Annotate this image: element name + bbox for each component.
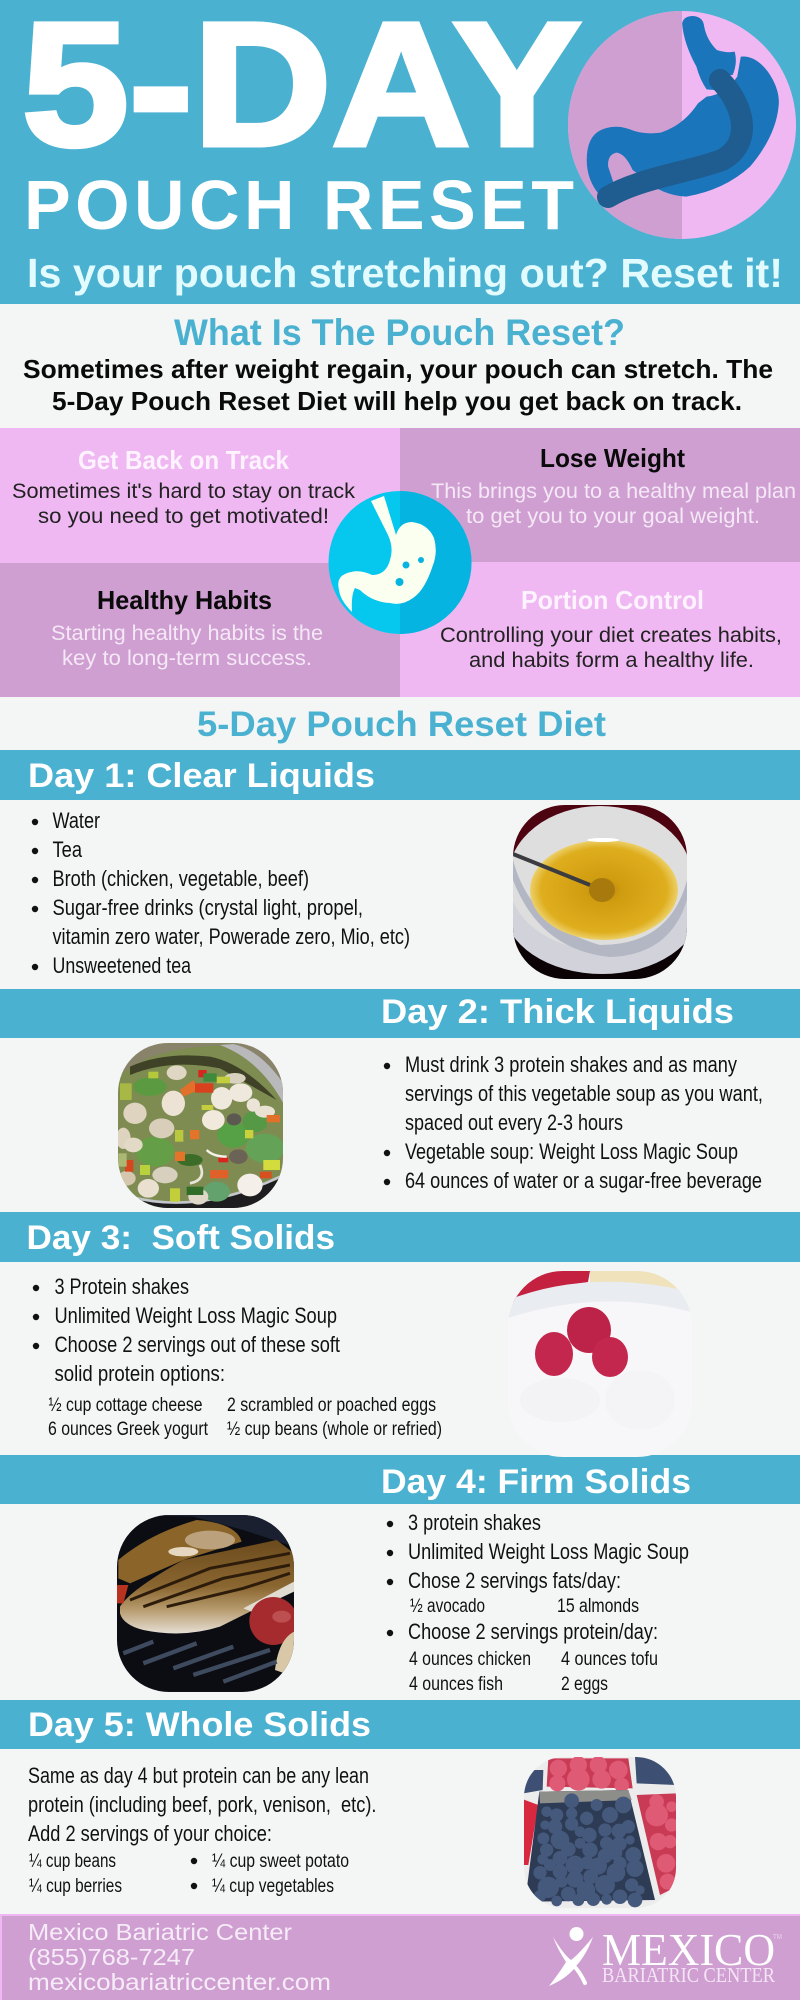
tagline: Is your pouch stretching out? Reset it!: [27, 250, 783, 296]
contact details: mexicobariatriccenter.com: [28, 1969, 331, 1995]
footer: [0, 1914, 800, 2000]
list: Day 2 items: [384, 1052, 763, 1193]
list: Day 1 items: Water: [52, 808, 100, 833]
intro text: [23, 354, 773, 416]
panel: Portion Control: and habits form a healthy life.: [469, 649, 754, 672]
panel: Get Back on Track: Sometimes it's hard to stay on track: [12, 480, 356, 503]
list: Day 2 items: Must drink 3 protein shakes and as many: [405, 1052, 737, 1077]
icon: white stomach in blue circle: [328, 491, 472, 634]
banner: Day 5: [0, 1700, 800, 1749]
banner: Day 4: Day 4: Firm Solids: [381, 1463, 691, 1501]
list: Day 4 items: Unlimited Weight Loss Magic Soup: [408, 1539, 689, 1564]
section: What Is The Pouch Reset: [23, 312, 773, 416]
list: Day 4 items: 2 eggs: [561, 1674, 608, 1695]
heading: What Is The Pouch Reset?: [174, 312, 625, 353]
panel: Lose Weight: [400, 428, 800, 562]
text: Day 5 description and choices: [28, 1763, 376, 1897]
image: vegetable soup: [116, 1043, 284, 1208]
heading: 5-Day Pouch Reset Diet: 5-Day Pouch Reset Diet: [197, 705, 606, 744]
logo: Mexico Bariatric Center: [549, 1924, 782, 1987]
panel: Lose Weight: to get you to your goal weight.: [466, 505, 760, 528]
banner: Day 4: [0, 1455, 800, 1504]
list: Day 1 items: Tea: [52, 837, 83, 862]
list: Day 4 items: Chose 2 servings fats/day:: [408, 1568, 621, 1593]
text: Day 5 description and choices: ¼ cup berries: [29, 1876, 122, 1897]
list: Day 1 items: [32, 808, 410, 978]
list: Day 3 items: [33, 1274, 442, 1440]
list: Day 4 items: 15 almonds: [557, 1596, 639, 1617]
contact details: [28, 1919, 331, 1995]
logo: Mexico Bariatric Center: MEXICO: [602, 1924, 775, 1975]
contact details: (855)768-7247: [28, 1944, 195, 1970]
panel: Healthy Habits: [0, 563, 400, 697]
text: Day 5 description and choices: ¼ cup vegetables: [212, 1876, 334, 1897]
banner: Day 3: [0, 1212, 800, 1262]
image: bowl of broth: [513, 805, 687, 979]
panel: Get Back on Track: so you need to get motivated!: [38, 505, 329, 528]
list: Day 2 items: spaced out every 2-3 hours: [405, 1110, 623, 1135]
text: Day 5 description and choices: ¼ cup beans: [29, 1851, 116, 1872]
banner: Day 2: [0, 989, 800, 1038]
list: Day 1 items: Sugar-free drinks (crystal light, propel,: [52, 895, 363, 920]
logo: Mexico Bariatric Center: BARIATRIC CENTER: [602, 1963, 775, 1987]
text: Day 5 description and choices: Same as day 4 but protein can be any lean: [28, 1763, 369, 1788]
intro text: Sometimes after weight regain, your pouch can stretch. The: [23, 354, 773, 384]
banner: Day 1: [0, 750, 800, 800]
panel: Get Back on Track: [0, 428, 400, 563]
text: Day 5 description and choices: protein (including beef, pork, venison, etc).: [28, 1792, 376, 1817]
list: Day 3 items: Choose 2 servings out of these soft: [54, 1332, 340, 1357]
panel: Get Back on Track: Get Back on Track: [78, 445, 289, 475]
list: Day 1 items: Unsweetened tea: [52, 953, 192, 978]
panel: Healthy Habits: key to long-term success.: [62, 647, 312, 670]
title: POUCH RESET: POUCH RESET: [24, 166, 574, 244]
panel: Lose Weight: This brings you to a healthy meal plan: [431, 480, 796, 503]
list: Day 4 items: Choose 2 servings protein/day:: [408, 1619, 658, 1644]
banner: Day 1: Day 1: Clear Liquids: [28, 757, 375, 795]
list: Day 1 items: vitamin zero water, Powerade zero, Mio, etc): [52, 924, 410, 949]
panel: Portion Control: [400, 562, 800, 697]
image: grilled chicken: [117, 1515, 297, 1692]
banner: Day 5: Day 5: Whole Solids: [28, 1706, 371, 1744]
list: Day 1 items: Broth (chicken, vegetable, beef): [52, 866, 309, 891]
contact details: Mexico Bariatric Center: [28, 1919, 292, 1945]
panel: Portion Control: Portion Control: [521, 585, 704, 615]
text: Day 5 description and choices: Add 2 servings of your choice:: [28, 1821, 272, 1846]
banner: Day 2: Day 2: Thick Liquids: [381, 993, 734, 1031]
intro text: 5-Day Pouch Reset Diet will help you get back on track.: [52, 386, 742, 416]
panel: Healthy Habits: Healthy Habits: [97, 585, 272, 615]
list: Day 4 items: 4 ounces chicken: [409, 1649, 531, 1670]
panel: Portion Control: Controlling your diet creates habits,: [440, 624, 782, 647]
list: Day 3 items: 3 Protein shakes: [54, 1274, 189, 1299]
list: Day 3 items: ½ cup cottage cheese: [48, 1395, 202, 1416]
text: Day 5 description and choices: ¼ cup sweet potato: [212, 1851, 349, 1872]
icon: stomach in circle: [568, 11, 796, 239]
panel: Healthy Habits: Starting healthy habits is the: [51, 622, 323, 645]
list: Day 3 items: ½ cup beans (whole or refried): [227, 1419, 442, 1440]
header banner: [0, 0, 800, 304]
list: Day 4 items: 4 ounces fish: [409, 1674, 503, 1695]
panel: Lose Weight: Lose Weight: [540, 443, 685, 473]
list: Day 3 items: 2 scrambled or poached eggs: [227, 1395, 436, 1416]
list: Day 4 items: ½ avocado: [410, 1596, 485, 1617]
list: Day 3 items: 6 ounces Greek yogurt: [48, 1419, 209, 1440]
list: Day 3 items: Unlimited Weight Loss Magic Soup: [54, 1303, 337, 1328]
list: Day 4 items: 4 ounces tofu: [561, 1649, 658, 1670]
image: yogurt with raspberries: [508, 1271, 692, 1457]
banner: Day 3: Day 3: Soft Solids: [26, 1219, 335, 1257]
list: Day 4 items: [387, 1510, 689, 1695]
logo: Mexico Bariatric Center: TM: [773, 1934, 782, 1941]
list: Day 3 items: solid protein options:: [54, 1361, 225, 1386]
list: Day 2 items: Vegetable soup: Weight Loss Magic Soup: [405, 1139, 738, 1164]
image: blueberries and raspberries: [523, 1756, 678, 1910]
list: Day 4 items: 3 protein shakes: [408, 1510, 541, 1535]
